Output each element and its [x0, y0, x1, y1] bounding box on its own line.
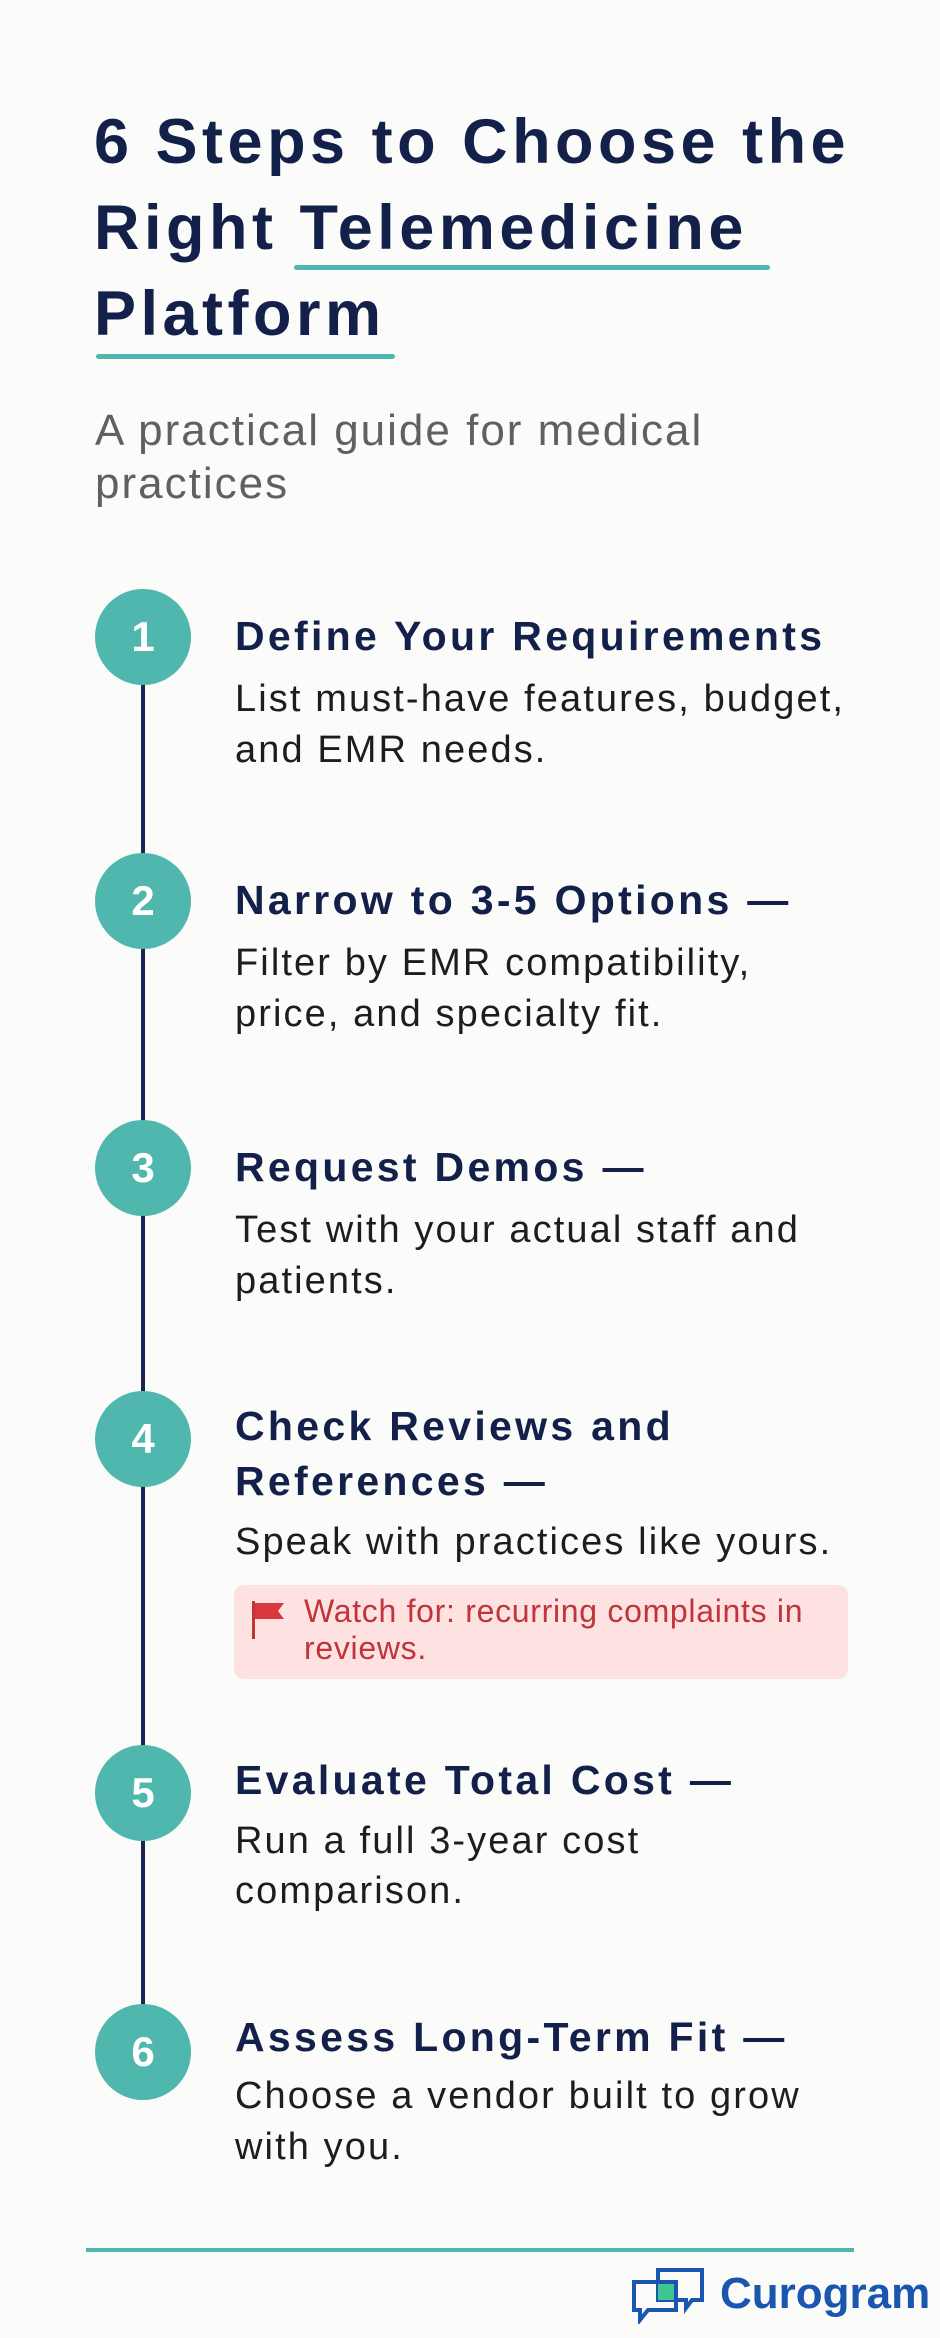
- callout text: Watch for: recurring complaints in: [304, 1593, 803, 1629]
- step 1 number: 1: [131, 613, 155, 660]
- step 3 text: Test with your actual staff and: [235, 1209, 800, 1251]
- step 3 text: patients.: [235, 1260, 398, 1302]
- step 6 text: with you.: [235, 2126, 404, 2168]
- logo text: Curogram: [720, 2269, 930, 2318]
- step 5 text: comparison.: [235, 1870, 465, 1912]
- step 2 text: [235, 942, 751, 1035]
- subtitle: practices: [95, 459, 289, 508]
- callout text: [304, 1593, 803, 1666]
- step 4 number: [95, 1391, 191, 1487]
- step 6 number: 6: [131, 2028, 155, 2075]
- step 4 text: Speak with practices like yours.: [235, 1521, 832, 1563]
- step 1 heading: Define Your Requirements: [235, 613, 825, 659]
- step 1: [95, 589, 845, 771]
- step 1 number: [95, 589, 191, 685]
- step 4 heading: Check Reviews and: [235, 1403, 674, 1449]
- step 2 number: 2: [131, 877, 155, 924]
- step 4 heading: References —: [235, 1458, 548, 1504]
- step 3 text: [235, 1209, 800, 1302]
- title: Platform: [94, 279, 386, 349]
- underline: Telemedicine: [294, 265, 770, 270]
- step 3 heading: Request Demos —: [235, 1144, 647, 1190]
- title: 6 Steps to Choose the: [94, 107, 850, 177]
- step 4 heading: [235, 1403, 674, 1504]
- step 1 text: [235, 678, 845, 771]
- step 6 text: Choose a vendor built to grow: [235, 2075, 801, 2117]
- step 6: [95, 2004, 801, 2168]
- step 2 text: price, and specialty fit.: [235, 993, 663, 1035]
- step 4 number: 4: [131, 1415, 155, 1462]
- step 2 text: Filter by EMR compatibility,: [235, 942, 751, 984]
- callout: warning: [234, 1585, 848, 1679]
- step 1 text: and EMR needs.: [235, 729, 547, 771]
- step 5 heading: Evaluate Total Cost —: [235, 1757, 734, 1803]
- underline: Platform: [96, 354, 395, 359]
- icon: chat bubbles: [632, 2268, 704, 2324]
- subtitle: [95, 406, 703, 508]
- step 5 text: [235, 1820, 640, 1912]
- step 5 number: 5: [131, 1769, 155, 1816]
- logo: Curogram: [632, 2268, 930, 2324]
- step 5: [95, 1745, 734, 1912]
- title: Right Telemedicine: [94, 193, 748, 263]
- step 3: [95, 1120, 800, 1302]
- subtitle: A practical guide for medical: [95, 406, 703, 455]
- step 2 heading: Narrow to 3-5 Options —: [235, 877, 792, 923]
- callout text: reviews.: [304, 1630, 427, 1666]
- step 6 number: [95, 2004, 191, 2100]
- footer rule: [86, 2248, 854, 2252]
- step 3 number: [95, 1120, 191, 1216]
- icon: red flag: [252, 1601, 284, 1639]
- step 6 heading: Assess Long-Term Fit —: [235, 2014, 788, 2060]
- step 5 text: Run a full 3-year cost: [235, 1820, 640, 1862]
- title: [94, 107, 850, 349]
- step 6 text: [235, 2075, 801, 2168]
- step 3 number: 3: [131, 1144, 155, 1191]
- step 5 number: [95, 1745, 191, 1841]
- timeline line: [141, 637, 145, 2054]
- step 2 number: [95, 853, 191, 949]
- step 4: [95, 1391, 848, 1679]
- step 2: [95, 853, 792, 1035]
- step 1 text: List must-have features, budget,: [235, 678, 845, 720]
